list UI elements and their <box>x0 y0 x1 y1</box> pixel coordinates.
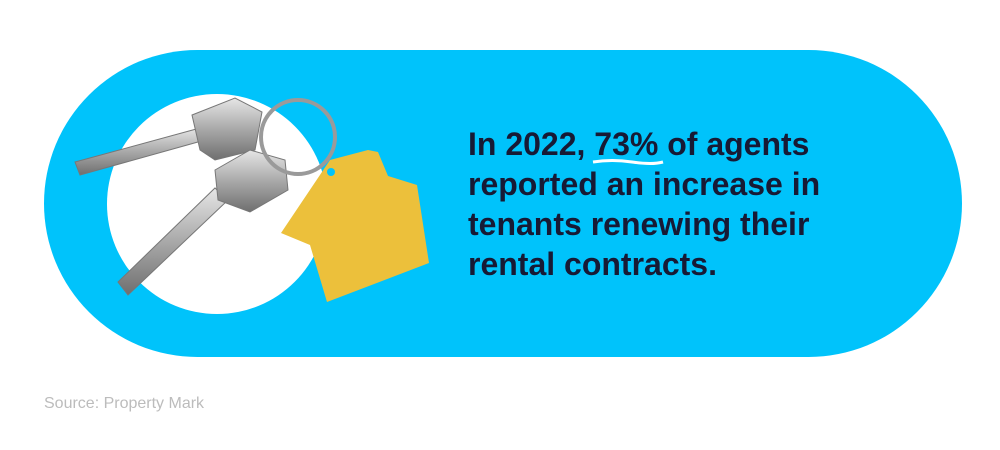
text block: statistic: In 2022, 73% of agents <box>468 126 809 162</box>
key ring <box>261 100 335 174</box>
key 2 <box>118 150 288 295</box>
text block: statistic: tenants renewing their <box>468 206 809 242</box>
key 1 <box>75 98 262 175</box>
source note: Source: Property Mark <box>44 395 204 412</box>
text block: statistic: rental contracts. <box>468 246 717 282</box>
panel: blue pill <box>44 50 962 357</box>
text block: statistic <box>468 126 820 282</box>
house tag <box>281 150 429 302</box>
text block: statistic: reported an increase in <box>468 166 820 202</box>
